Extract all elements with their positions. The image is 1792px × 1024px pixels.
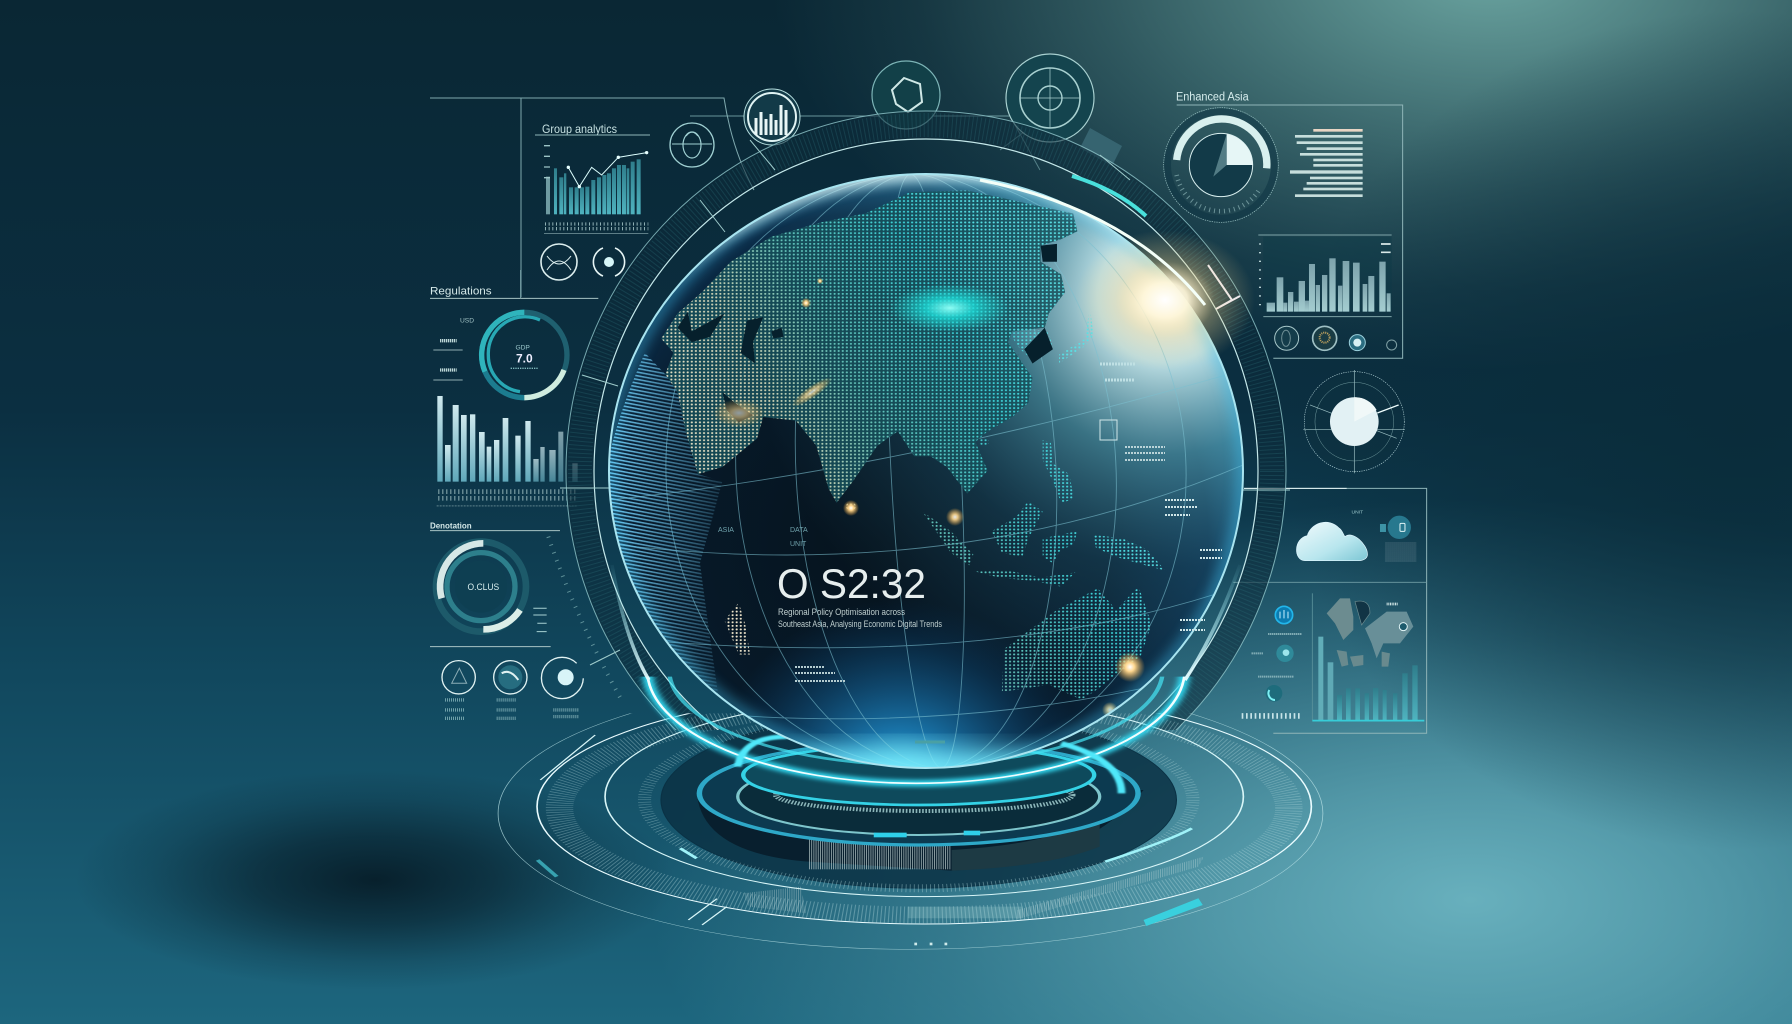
callout bracket <box>1208 265 1240 309</box>
light flare <box>980 180 1255 370</box>
icon: dot gauge <box>593 248 625 276</box>
icon: connector tag <box>1080 128 1122 166</box>
left limb stripes <box>604 353 722 696</box>
heading: denotation: Denotation <box>430 521 472 531</box>
panel: regulation donut and bars <box>430 270 623 718</box>
chart: second donut <box>436 542 547 632</box>
heading: group analytics: Group analytics <box>542 122 617 136</box>
icon: fist badge <box>872 61 940 129</box>
chart: donut gauge: GDP <box>515 344 530 351</box>
map annotations <box>718 364 1222 742</box>
bar chart <box>1312 593 1424 721</box>
icon: dial badge <box>1006 54 1094 142</box>
central figure: O S2:32 <box>777 560 926 607</box>
icon: lock badge <box>1380 516 1417 562</box>
icon: shield face <box>670 123 714 167</box>
bright city lights <box>713 278 1145 718</box>
icon: loop <box>541 244 577 280</box>
bottom glow <box>790 734 1046 767</box>
icon: bars badge <box>744 89 800 145</box>
map annotations: ASIA <box>718 527 734 534</box>
bottom tick dots <box>914 943 947 945</box>
map blobs <box>1327 598 1413 667</box>
lower glow arcs rising beside globe <box>612 565 1240 680</box>
heading: enhanced asia: Enhanced Asia <box>1176 90 1249 104</box>
icon row <box>1275 326 1397 351</box>
concentric rings <box>498 713 1324 950</box>
panel: lower-right cloud and map: UNIT <box>1351 509 1363 515</box>
chart: second donut: O.CLUS <box>467 582 499 592</box>
chart: horizontal bars <box>1290 129 1363 197</box>
bar and line chart <box>544 146 648 233</box>
globe <box>600 161 1260 796</box>
icon column <box>1242 606 1302 716</box>
chart: radial gauge <box>1164 108 1278 222</box>
heading: regulations: Regulations <box>430 286 492 298</box>
central caption <box>778 607 942 630</box>
bar chart <box>437 396 578 482</box>
glow rings <box>638 676 1194 790</box>
graticule <box>609 161 1243 781</box>
panel: top-right gauge, bars and chart <box>1164 90 1405 473</box>
central caption: Regional Policy Optimisation across <box>778 607 905 618</box>
panel: top left analytics <box>430 98 754 297</box>
chart: donut gauge: 7.0 <box>516 352 533 366</box>
chart: column chart <box>1258 235 1392 317</box>
land underlay <box>661 190 1077 503</box>
top icons row <box>690 54 1122 170</box>
orbital ring around the globe <box>560 110 1290 730</box>
holographic base <box>498 676 1324 950</box>
small stat labels: USD <box>460 318 474 325</box>
teal highlight over north asia <box>890 284 1010 332</box>
icon row <box>442 657 583 699</box>
small stat labels <box>433 318 474 380</box>
map annotations: UNIT <box>790 541 807 548</box>
cyan arc highlight at upper right <box>1072 176 1146 216</box>
asia and oceania dotted landmass <box>662 190 1164 698</box>
central caption: Southeast Asia, Analysing Economic Digital Trends <box>778 619 942 630</box>
platform cylinder <box>697 742 1144 871</box>
icon: cloud <box>1297 522 1367 561</box>
map annotations: DATA <box>790 527 808 534</box>
inland seas <box>678 244 1057 422</box>
chart: donut gauge <box>482 312 567 398</box>
panel: lower-right cloud and map <box>1233 488 1427 733</box>
chart: white radar dial <box>1303 370 1405 473</box>
top atmosphere haze <box>680 175 1148 286</box>
